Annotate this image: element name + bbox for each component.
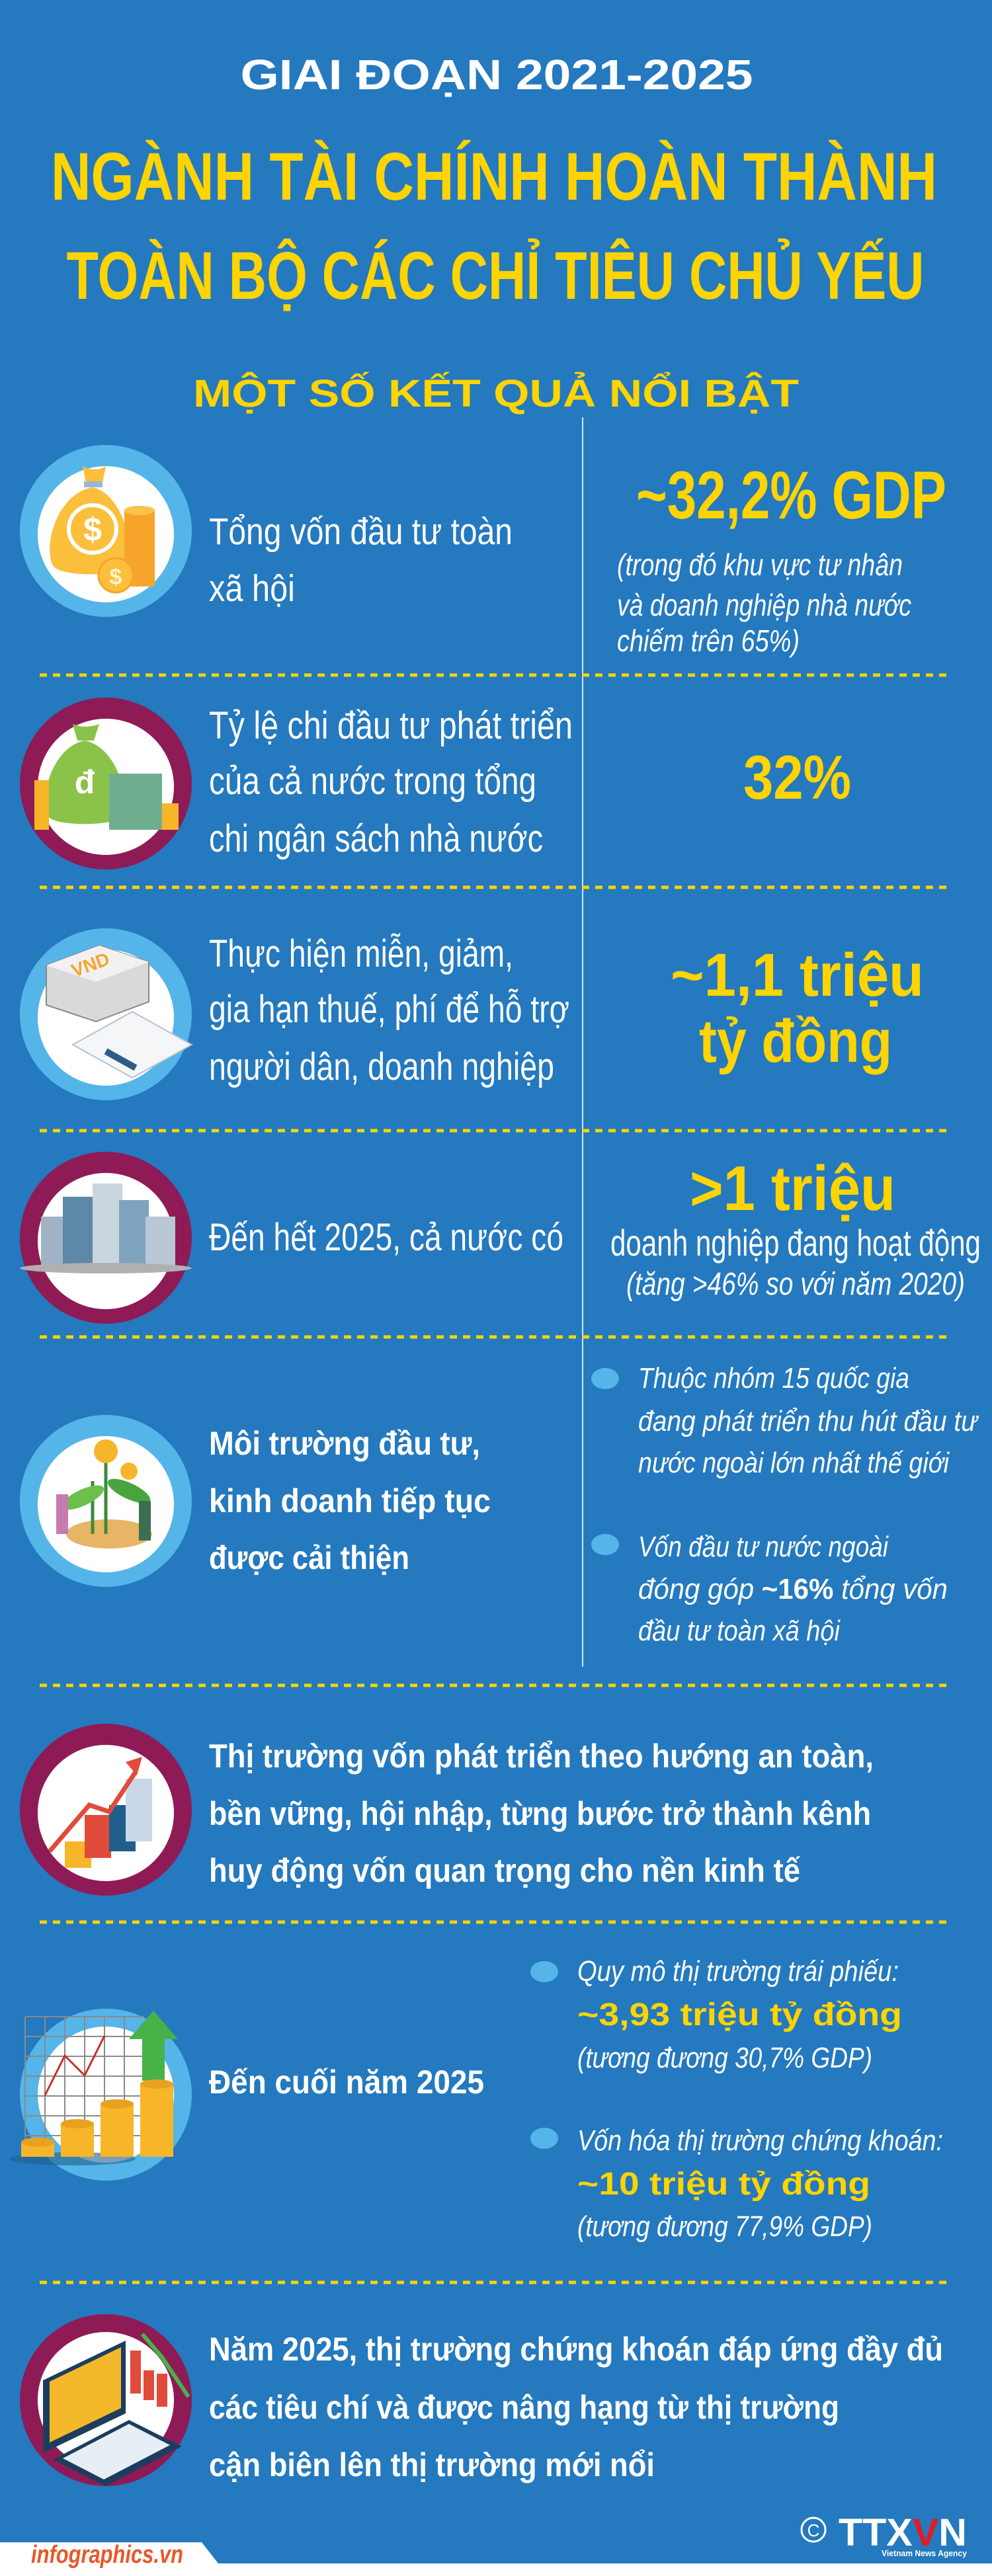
icon: money bag: $	[83, 511, 102, 548]
text: label: được cải thiện	[209, 1539, 409, 1576]
icon: coins and growth arrow	[10, 2009, 192, 2181]
panel: row 2 development spending	[20, 698, 851, 869]
value: >1 triệu	[690, 1153, 895, 1224]
title	[51, 139, 937, 313]
bullet: FDI share	[591, 1531, 948, 1647]
bullet: stock market cap: ~10 triệu tỷ đồng	[577, 2167, 870, 2202]
bullet: stock market cap: Vốn hóa thị trường chứng khoán:	[577, 2124, 943, 2157]
note: (trong đó khu vực tư nhân	[617, 547, 903, 582]
vertical divider	[582, 417, 583, 1667]
text: label: người dân, doanh nghiệp	[209, 1045, 554, 1088]
footer: source bar	[0, 2541, 992, 2576]
icon: plants	[20, 1415, 192, 1587]
value	[671, 942, 924, 1075]
bullet: bond market	[530, 1955, 902, 2074]
value: tỷ đồng	[699, 1008, 892, 1075]
note: chiếm trên 65%)	[617, 624, 800, 658]
icon: green bag and cash	[20, 698, 192, 869]
note	[617, 547, 911, 658]
bullet: FDI share: đầu tư toàn xã hội	[638, 1615, 841, 1647]
icon: documents: VND	[69, 948, 112, 981]
text: label	[209, 704, 573, 860]
text: statement	[209, 2331, 943, 2483]
panel: row 8 stock market upgrade	[20, 2314, 943, 2486]
bullet: FDI share: Vốn đầu tư nước ngoài	[638, 1531, 889, 1563]
panel: row 5 business environment	[20, 1362, 979, 1647]
icon: laptop	[20, 2314, 192, 2486]
heading: period: GIAI ĐOẠN 2021-2025	[241, 51, 753, 99]
bullet: top 15	[591, 1362, 979, 1479]
text: statement: các tiêu chí và được nâng hạng từ thị trường	[209, 2389, 839, 2426]
text: label: Tổng vốn đầu tư toàn	[209, 510, 513, 553]
bullet: FDI share: đóng góp ~16% tổng vốn	[638, 1573, 948, 1605]
bullet: stock market cap	[530, 2124, 943, 2243]
logo: TTXVN: TTXVN	[839, 2511, 967, 2554]
text: statement	[209, 1738, 874, 1889]
logo: TTXVN: Vietnam News Agency	[882, 2548, 968, 2558]
text: label: kinh doanh tiếp tục	[209, 1482, 491, 1519]
value: 32%	[743, 743, 851, 812]
note: và doanh nghiệp nhà nước	[617, 588, 911, 622]
panel: row 1 total investment	[20, 445, 946, 658]
value: ~1,1 triệu	[671, 942, 924, 1009]
bullet: bond market: (tương đương 30,7% GDP)	[577, 2042, 872, 2074]
bullet: top 15: nước ngoài lớn nhất thế giới	[638, 1447, 950, 1479]
text: label: Đến cuối năm 2025	[209, 2064, 484, 2101]
text: statement: huy động vốn quan trọng cho nền kinh tế	[209, 1852, 800, 1889]
icon: buildings	[20, 1152, 192, 1324]
text: statement: Thị trường vốn phát triển theo hướng an toàn,	[209, 1738, 874, 1775]
icon: documents	[20, 928, 192, 1100]
bullet: bond market: ~3,93 triệu tỷ đồng	[577, 1997, 902, 2033]
text: label: Tỷ lệ chi đầu tư phát triển	[209, 704, 573, 747]
footer: source bar: infographics.vn	[31, 2541, 183, 2569]
text: label: chi ngân sách nhà nước	[209, 817, 543, 860]
panel: row 3 tax relief	[20, 928, 924, 1100]
panel: row 6 capital market	[20, 1724, 874, 1896]
text: label: xã hội	[209, 567, 295, 610]
bullet: stock market cap: (tương đương 77,9% GDP)	[577, 2210, 872, 2243]
text: label	[209, 932, 569, 1088]
text: label	[209, 510, 513, 610]
text: label: Thực hiện miễn, giảm,	[209, 932, 513, 975]
bullet: bond market: Quy mô thị trường trái phiếu:	[577, 1955, 899, 1988]
bullet: top 15: Thuộc nhóm 15 quốc gia	[638, 1362, 909, 1394]
text: statement: cận biên lên thị trường mới nổi	[209, 2446, 655, 2483]
value caption	[610, 1222, 981, 1302]
text: statement: bền vững, hội nhập, từng bước trở thành kênh	[209, 1795, 871, 1832]
text: label: Đến hết 2025, cả nước có	[209, 1216, 563, 1259]
text: label	[209, 1425, 491, 1576]
icon: green bag and cash: đ	[75, 764, 95, 801]
panel: row 4 enterprises	[20, 1152, 981, 1324]
icon: bar chart with arrow	[20, 1724, 192, 1896]
logo: TTXVN: C	[807, 2520, 819, 2540]
icon: money bag: $	[110, 565, 122, 590]
subtitle: MỘT SỐ KẾT QUẢ NỔI BẬT	[193, 372, 799, 415]
text: label: của cả nước trong tổng	[209, 760, 536, 803]
icon: money bag	[20, 445, 192, 617]
text: label: gia hạn thuế, phí để hỗ trợ	[209, 988, 569, 1031]
panel: row 7 end of 2025	[10, 1955, 943, 2243]
text: label: Môi trường đầu tư,	[209, 1425, 480, 1462]
